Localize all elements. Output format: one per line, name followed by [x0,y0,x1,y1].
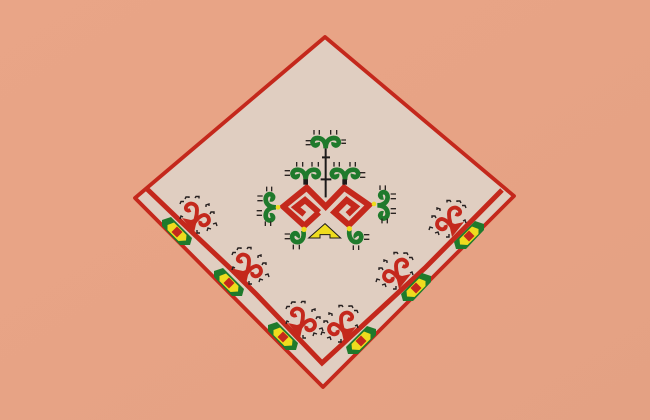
border motifs left [162,196,323,350]
central motif [257,130,396,250]
black stem [321,148,331,197]
cloth diamond [135,37,514,387]
green curls [266,138,388,242]
yellow triangle [309,224,341,238]
red meander [283,188,369,226]
inner border line [147,189,502,363]
border motifs right [321,200,484,354]
black ticks [257,130,396,250]
black knots and yellow joints [276,179,376,232]
